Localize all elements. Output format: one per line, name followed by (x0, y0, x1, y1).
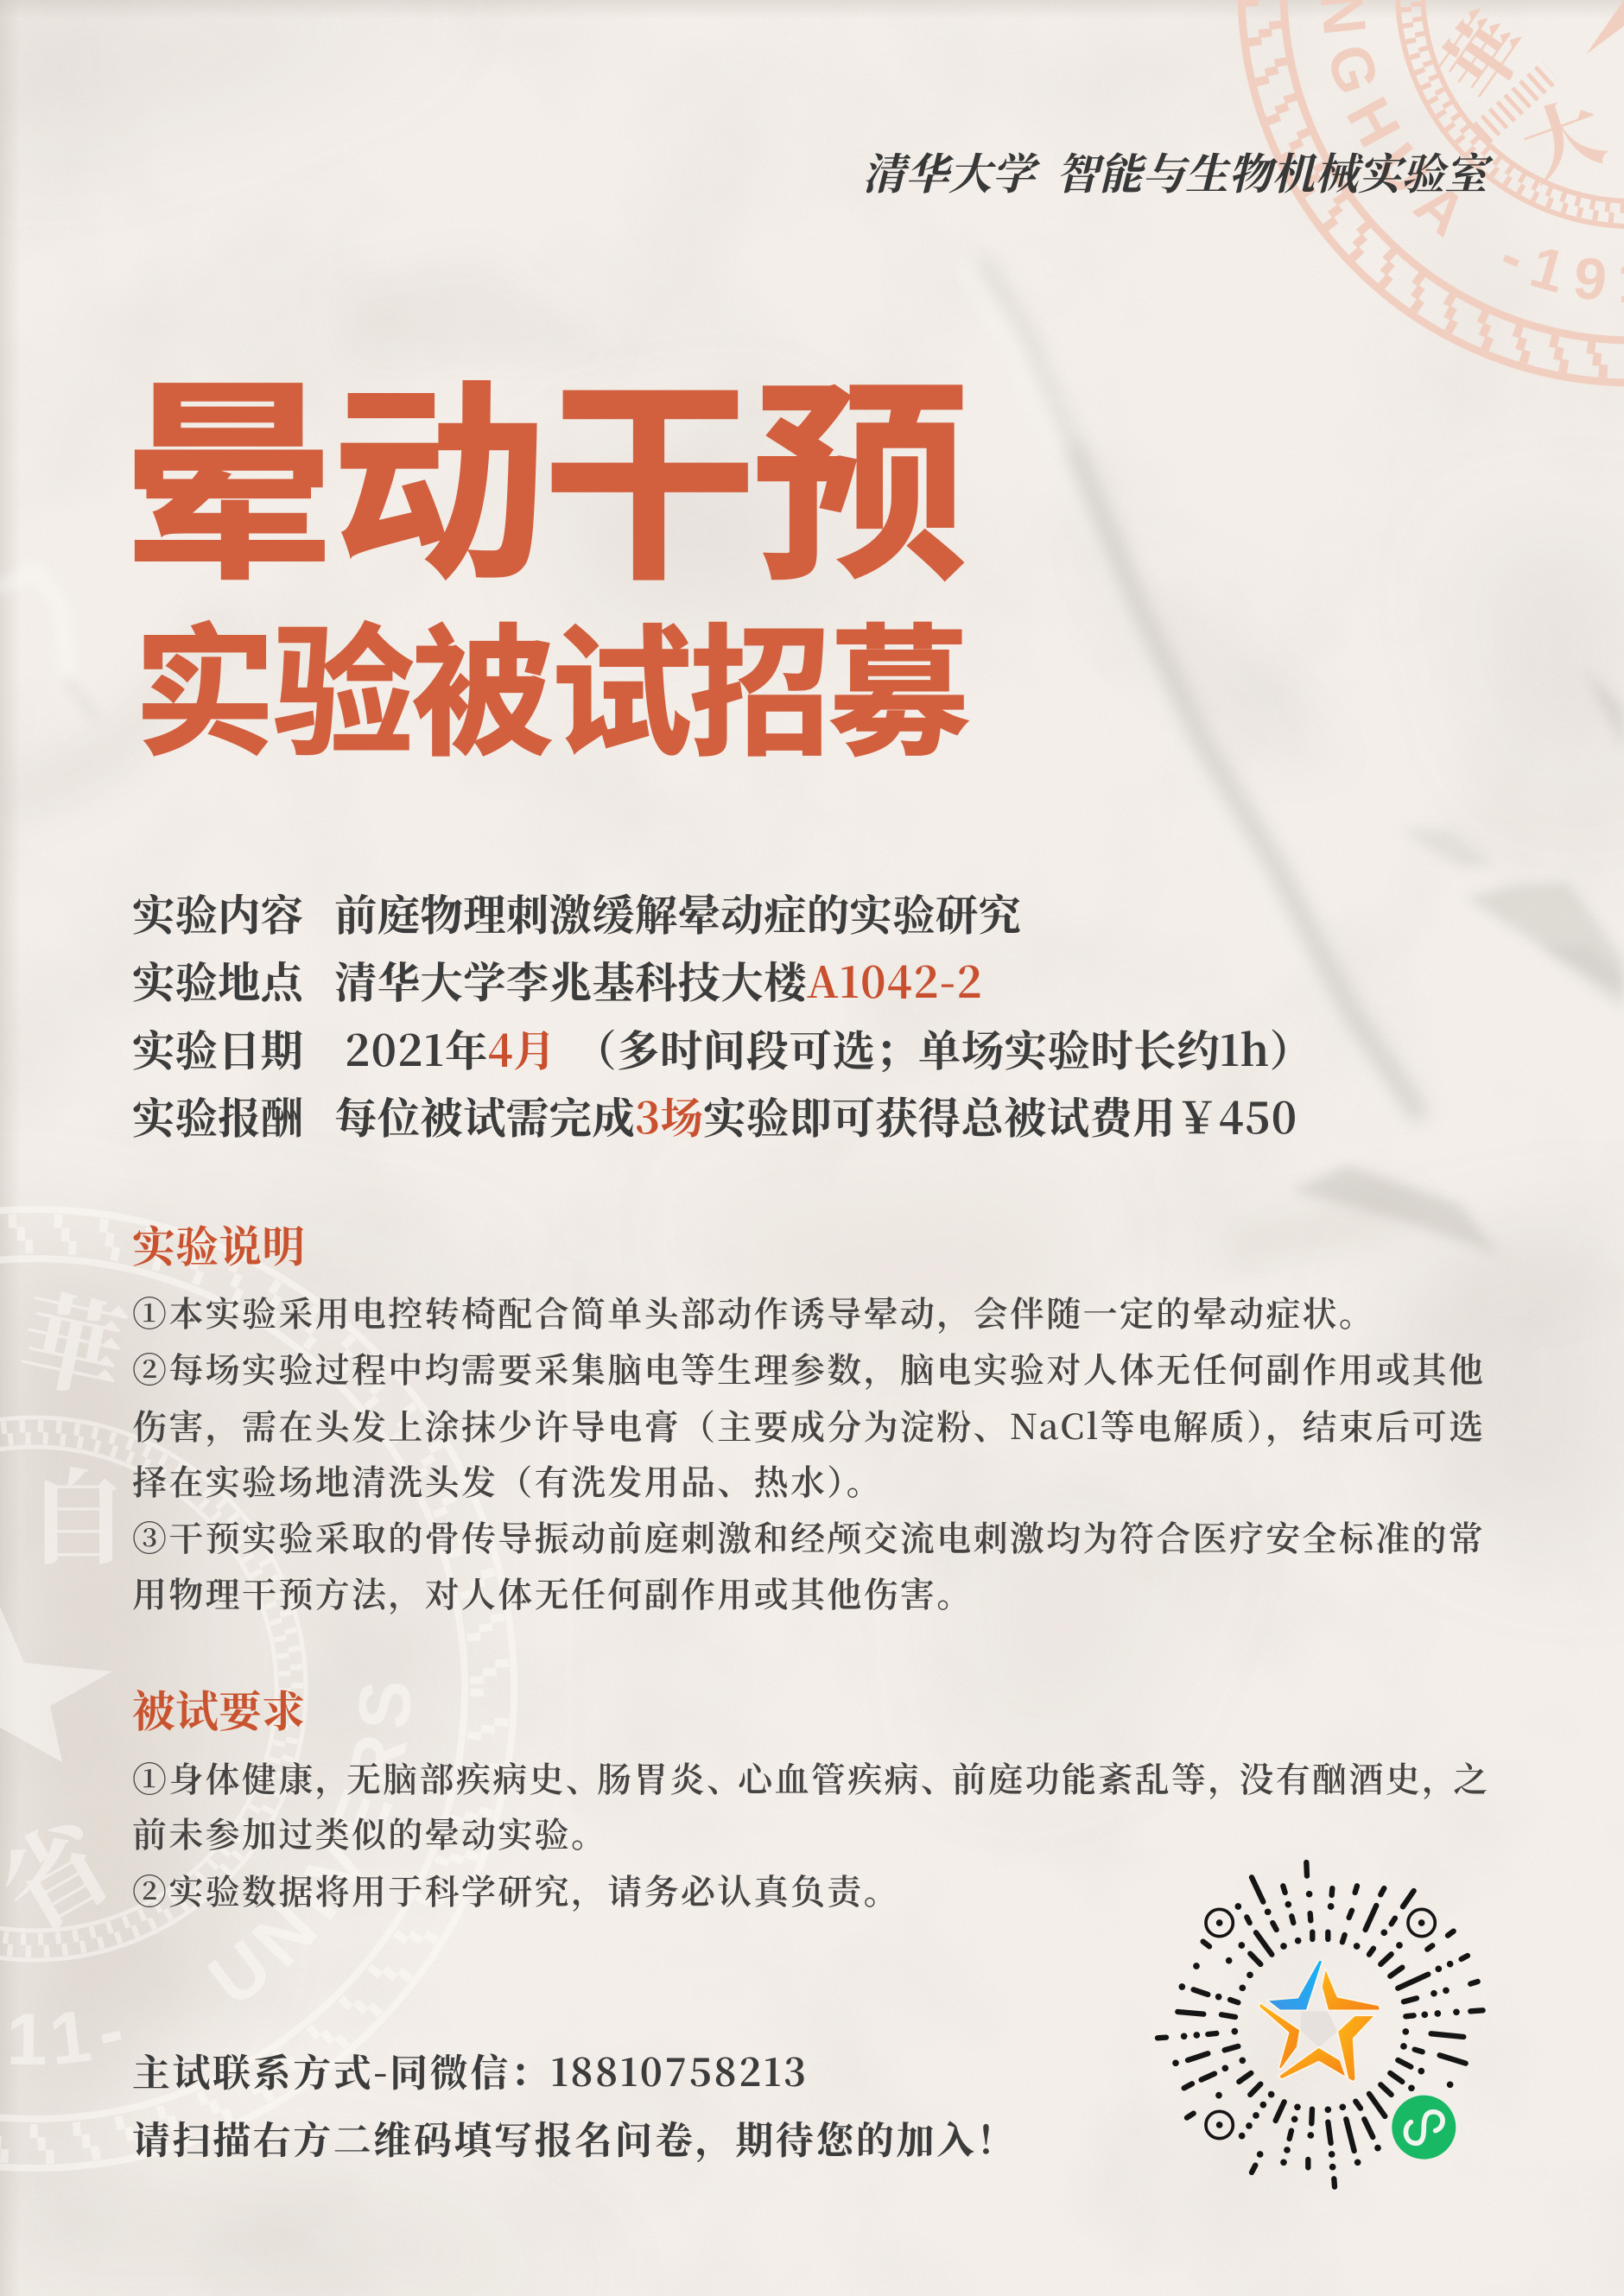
info block: 前庭物理刺激缓解晕动症的实验研究 (334, 882, 1021, 943)
info: content (132, 882, 1021, 943)
info: date: 实验日期 (132, 1018, 303, 1079)
inner rope ring (1398, 0, 1624, 226)
info: reward (132, 1094, 303, 1137)
info block: 2021年4月 （多时间段可选；单场实验时长约1h） (345, 1018, 1313, 1079)
paper crease: main diagonal fold (966, 259, 1421, 1121)
star logo (1259, 1960, 1380, 2082)
text: subject requirements (0, 1754, 1520, 1918)
info block: 每位被试需完成3场实验即可获得总被试费用￥450 (334, 1085, 1297, 1146)
text: subject requirements: ①身体健康，无脑部疾病史、肠胃炎、心血管疾病、前庭功能紊乱等，没有酗酒史，之 (132, 1753, 1490, 1802)
seal letters: 11- (10, 2012, 121, 2064)
text: subject requirements: ②实验数据将用于科学研究，请务必认真负责。 (132, 1865, 900, 1914)
seal letters (0, 1256, 411, 2064)
outer rope ring (0, 1209, 514, 2168)
QR finder marks (1206, 1909, 1435, 2139)
contact: 请扫描右方二维码填写报名问卷，期待您的加入！ (132, 2109, 1017, 2165)
QR strokes (1158, 1862, 1483, 2187)
text: experiment notes: ②每场实验过程中均需要采集脑电等生理参数，脑电实验对人体无任何副作用或其他 (132, 1343, 1485, 1392)
seal letters: 自 (26, 1437, 130, 1585)
contact: 主试联系方式-同微信：18810758213 (132, 2042, 809, 2097)
mini-program badge (1392, 2096, 1456, 2160)
info: content: 实验内容 (132, 882, 303, 943)
text: experiment notes (0, 1287, 1520, 1615)
text: 智能与生物机械实验室 (1056, 140, 1488, 202)
info: reward: 实验报酬 (132, 1085, 303, 1146)
text: experiment notes: 伤害，需在头发上涂抹少许导电膏（主要成分为淀粉、NaCl等电解质），结束后可选 (132, 1400, 1485, 1449)
info: location: 实验地点 (132, 949, 303, 1011)
seal letters (1321, 0, 1624, 302)
seal letters: 華 (8, 1256, 140, 1423)
inner rope ring (0, 1418, 306, 1960)
text: experiment notes: ①本实验采用电控转椅配合简单头部动作诱导晕动，会伴随一定的晕动症状。 (132, 1287, 1375, 1336)
info block (132, 882, 1313, 1146)
text: experiment notes: 用物理干预方法，对人体无任何副作用或其他伤害。 (132, 1568, 974, 1617)
info: location (132, 949, 983, 1011)
header: lab name (862, 140, 1494, 202)
contact (0, 2046, 1037, 2159)
paper crease: left side wrinkles (0, 570, 95, 717)
outer rope ring (1241, 0, 1624, 383)
info block: 清华大学李兆基科技大楼A1042-2 (334, 949, 983, 1011)
QR dots (1172, 1891, 1460, 2170)
title: main: 晕动干预 (121, 312, 964, 622)
heading: subject requirements: 被试要求 (132, 1678, 305, 1740)
heading: experiment notes: 实验说明 (132, 1213, 305, 1275)
info: date (132, 1027, 303, 1069)
header: lab name: 清华大学 (862, 140, 1035, 202)
paper crease: folded wrinkles right side (1291, 668, 1624, 1254)
text: experiment notes: 择在实验场地清洗头发（有洗发用品、热水）。 (132, 1456, 883, 1505)
text: experiment notes: ③干预实验采取的骨传导振动前庭刺激和经颅交流电刺激均为符合医疗安全标准的常 (132, 1512, 1485, 1561)
seal letters: 大 (1505, 68, 1618, 202)
text: subject requirements: 前未参加过类似的晕动实验。 (132, 1808, 607, 1857)
title: sub: 实验被试招募 (134, 580, 967, 784)
